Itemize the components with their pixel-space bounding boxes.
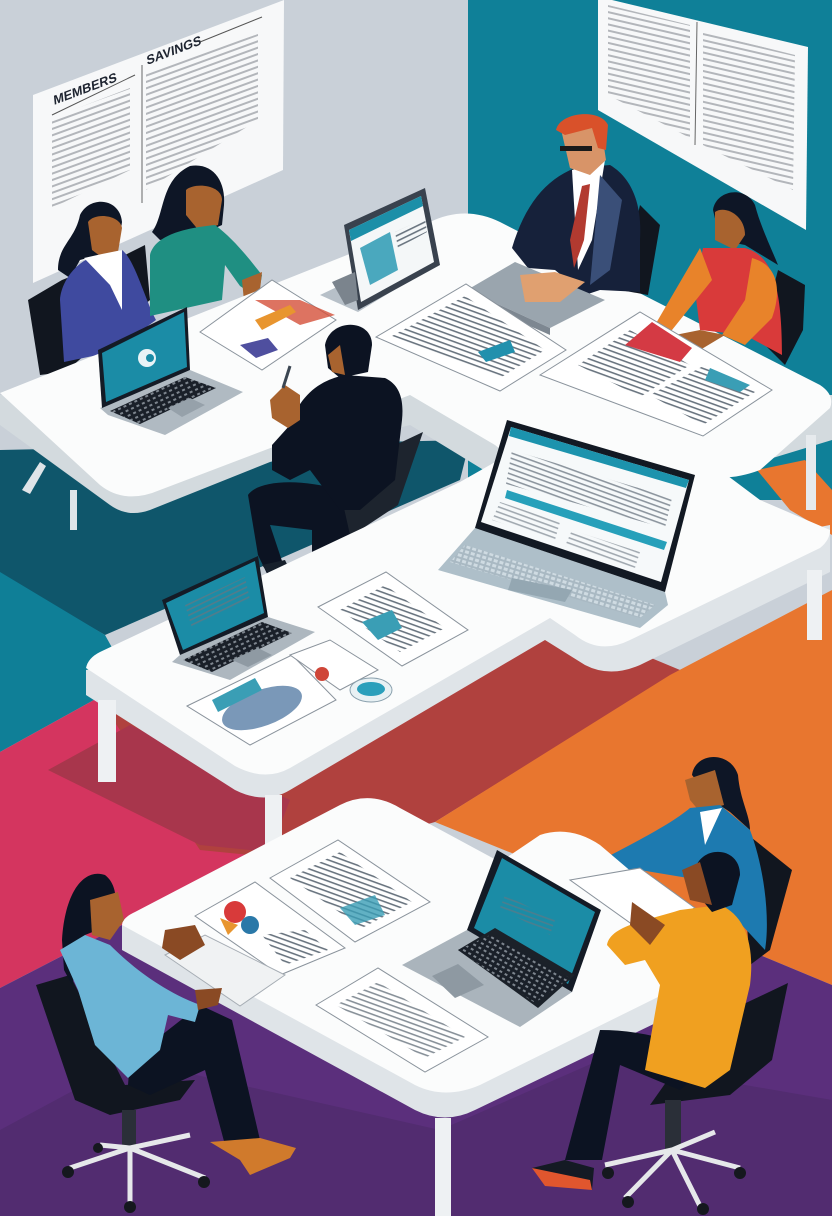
table 3: bottom table [122, 798, 700, 1216]
person: woman in teal top [150, 165, 262, 316]
person: woman in blue jacket [550, 757, 767, 950]
laptop: large centre [438, 420, 695, 628]
chair: blue blazer woman [28, 245, 150, 375]
person: man with red hair and glasses [512, 114, 640, 295]
document: graphics sheet [195, 882, 345, 975]
person: man in black from behind [248, 325, 423, 585]
person: man in orange sweater [532, 852, 751, 1190]
laptop: bottom [402, 850, 601, 1027]
document: centre chart sheet [318, 572, 468, 666]
poster heading: savings: SAVINGS [146, 32, 202, 68]
table 2: middle table [86, 418, 830, 847]
document: small note with red icon [290, 640, 378, 690]
floor: dark teal [0, 440, 470, 635]
wall poster: left [33, 0, 284, 283]
document: top report sheet [270, 840, 430, 942]
chair: back woman [745, 838, 792, 965]
chair: orange sweater man [602, 983, 788, 1215]
chair: left woman [36, 975, 210, 1213]
document: lower chart sheet [187, 655, 336, 745]
floor: orange patch [757, 460, 832, 535]
floor: purple [0, 882, 832, 1216]
document: bottom sheet [316, 968, 488, 1072]
chair base [605, 1132, 740, 1206]
background: teal wall [468, 0, 832, 500]
poster heading: members: MEMBERS [53, 69, 118, 108]
screen logo [138, 349, 156, 367]
laptop: top centre [320, 188, 440, 312]
floor: red band [100, 620, 680, 860]
wall poster: right [598, 0, 808, 230]
table 2 legs [98, 700, 116, 782]
table 1 legs [70, 490, 77, 530]
chair: man with glasses [620, 205, 660, 295]
table 1: top table [0, 214, 832, 530]
floor: shadow on pink [48, 725, 290, 852]
document: right note sheet [570, 868, 695, 930]
document: centre sheet [376, 284, 566, 391]
floor: orange [435, 590, 832, 985]
document: open report pages [540, 312, 772, 436]
chair back [330, 432, 423, 540]
closed laptop on table [467, 262, 605, 335]
chair base [70, 1135, 205, 1205]
laptop: lower left [162, 556, 315, 680]
person: woman in light blue shirt [60, 874, 296, 1175]
badge: round teal disc [350, 678, 392, 702]
background: grey wall [0, 0, 469, 480]
floor: teal [0, 572, 130, 752]
floor: purple shadow [0, 1060, 832, 1216]
person: woman in blue blazer [58, 202, 156, 362]
document: pad in front of woman [165, 935, 285, 1006]
floor: pink [0, 680, 300, 988]
document: left chart sheet [200, 280, 336, 370]
table 3 leg [435, 1118, 451, 1216]
chair: orange-sleeve woman [760, 270, 805, 365]
hands of man with glasses [520, 272, 585, 302]
laptop: top left [98, 307, 243, 435]
person: woman in red dress [655, 192, 782, 355]
